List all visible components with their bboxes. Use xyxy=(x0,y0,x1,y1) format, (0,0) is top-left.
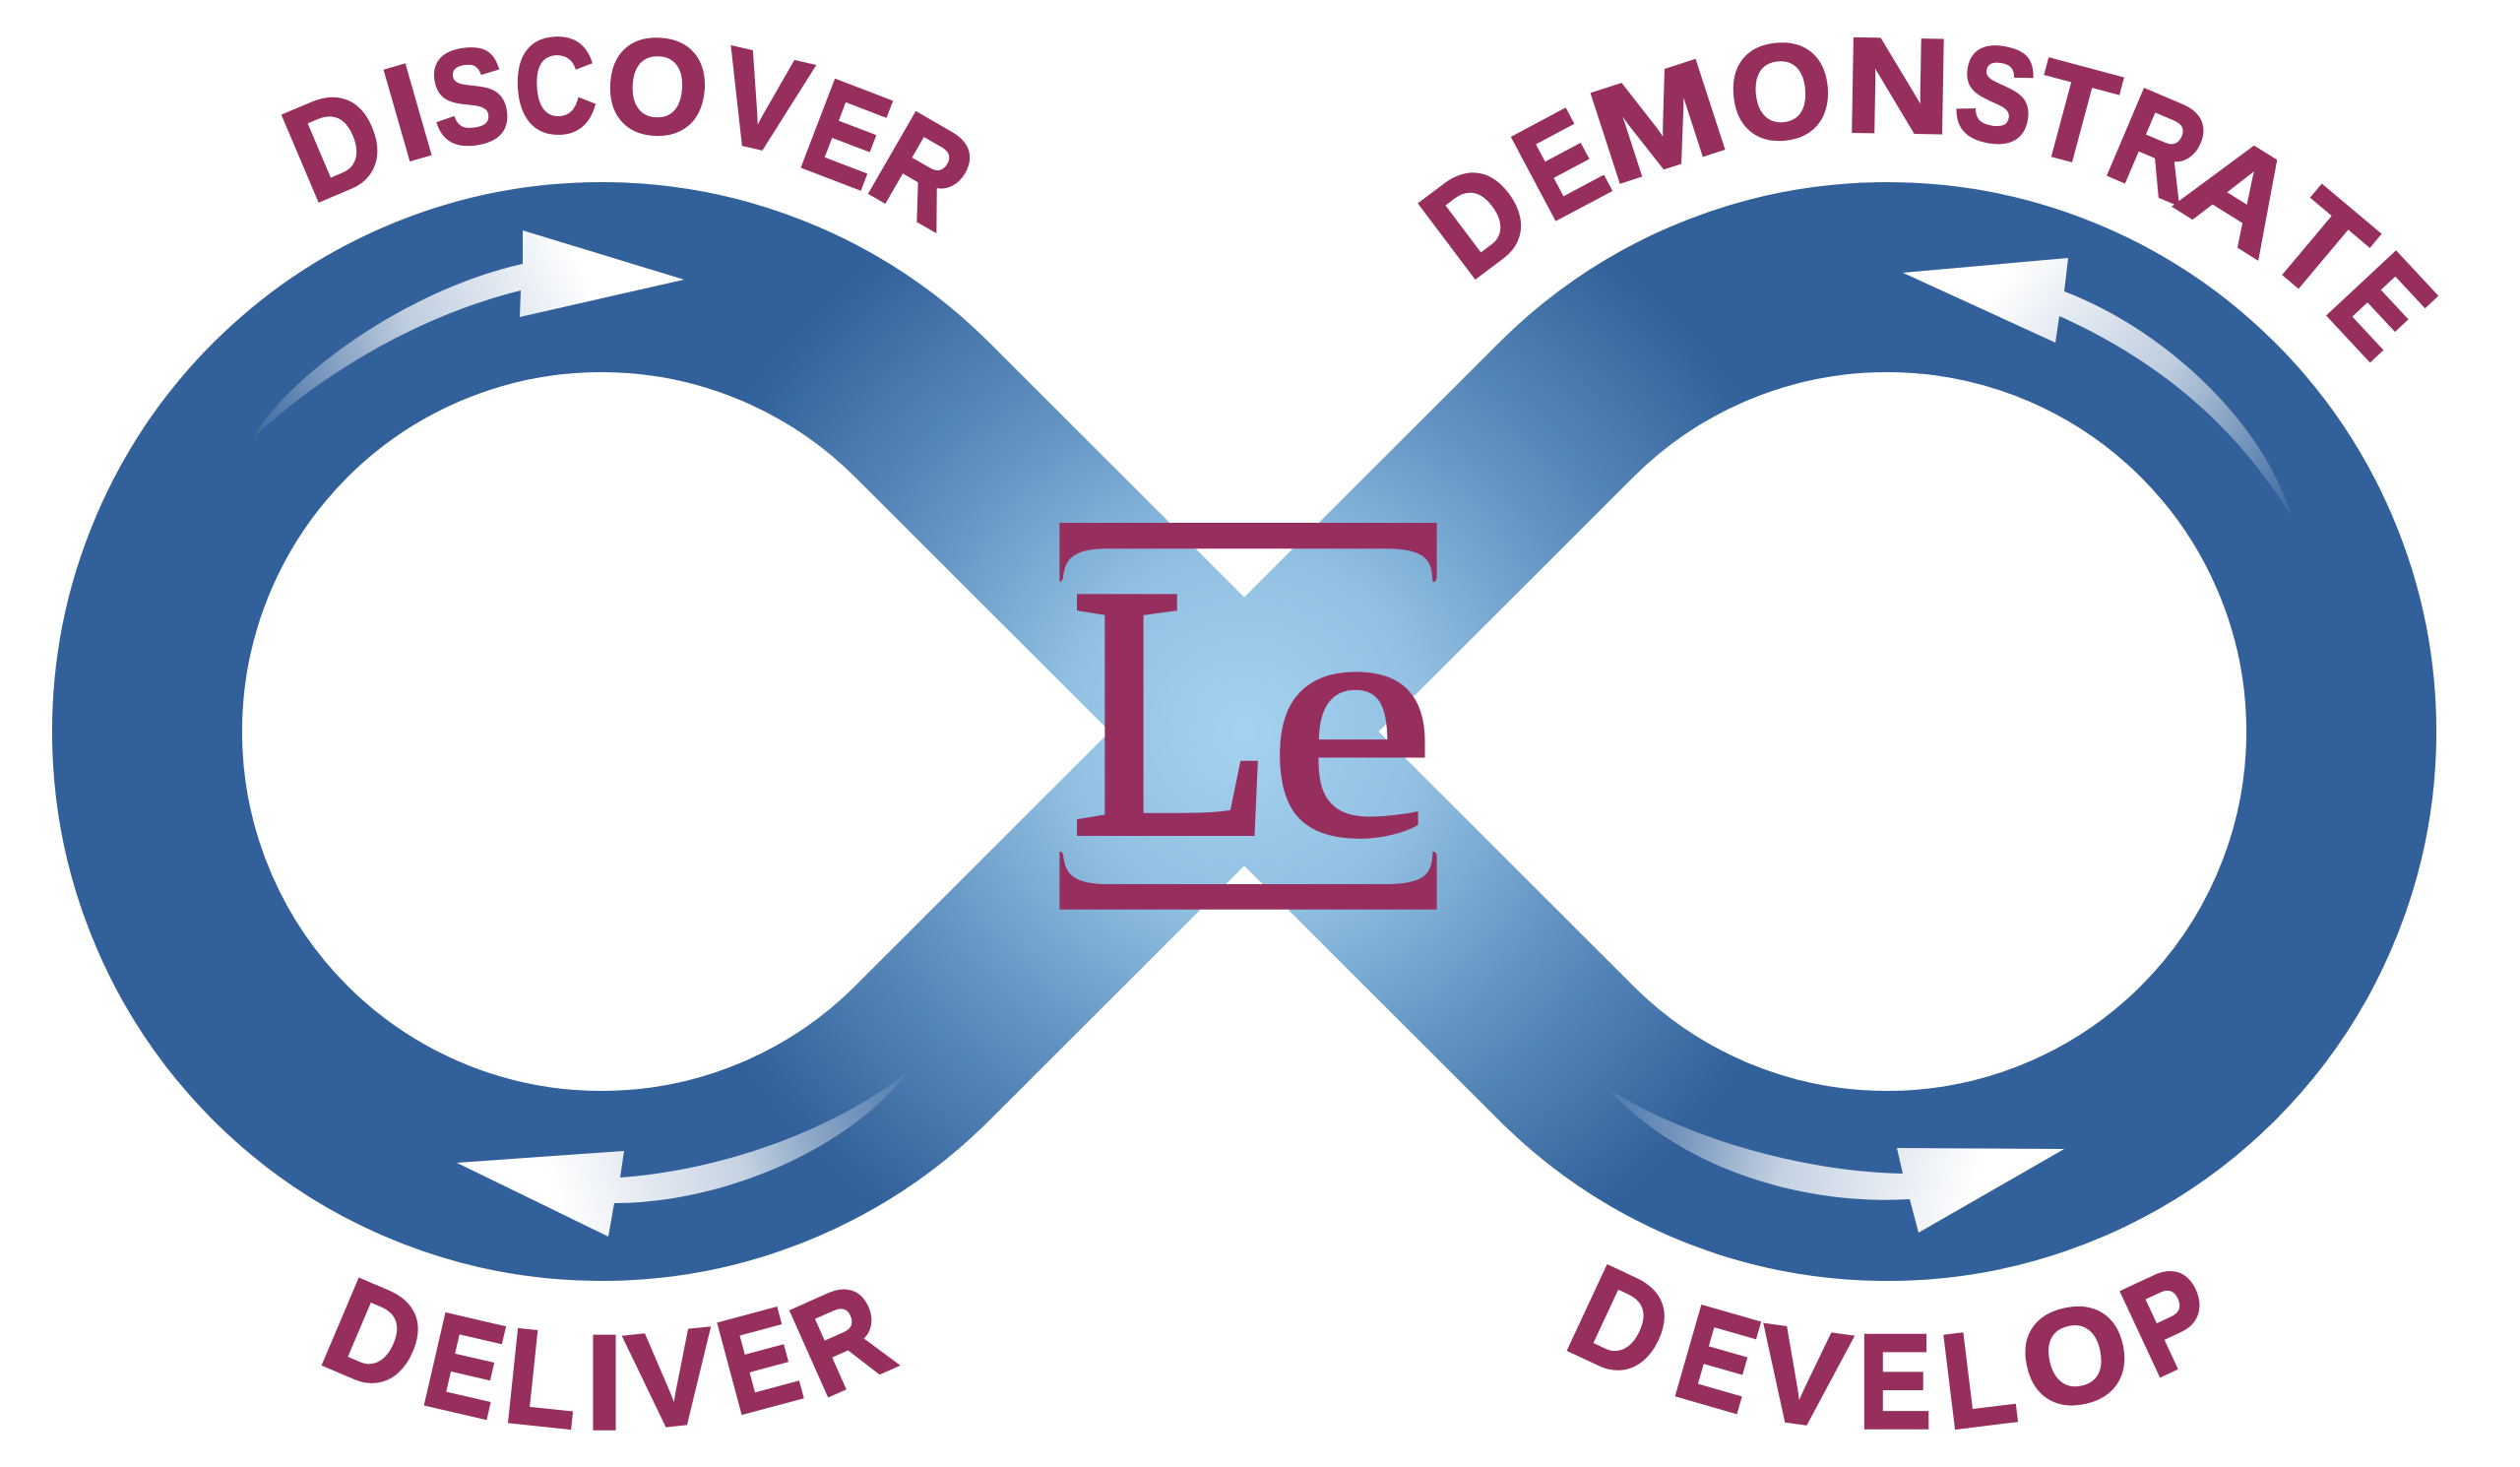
arrow: deliver xyxy=(457,1072,908,1237)
label: DEMONSTRATE: N xyxy=(1844,11,1952,161)
logo top bracket xyxy=(1059,523,1437,582)
label: DELIVER xyxy=(305,1250,912,1458)
label: DEMONSTRATE: O xyxy=(1724,13,1838,171)
label: DEVELOP: E xyxy=(1662,1277,1774,1441)
label: DEMONSTRATE: S xyxy=(1945,14,2048,175)
label: DEMONSTRATE: T xyxy=(2242,163,2398,328)
label: DISCOVER: C xyxy=(511,8,599,162)
logo bottom bracket xyxy=(1059,852,1437,910)
label: DEVELOP: E xyxy=(1858,1308,1931,1457)
label: DISCOVER: S xyxy=(421,18,518,176)
label: DISCOVER: R xyxy=(849,85,997,257)
label: DISCOVER: O xyxy=(602,9,713,164)
label: DEVELOP: P xyxy=(2103,1237,2237,1405)
label: DELIVER: E xyxy=(705,1279,814,1443)
label: DEVELOP: L xyxy=(1934,1301,2024,1458)
label: DEMONSTRATE: D xyxy=(1396,132,1557,305)
logo: Le monogram xyxy=(1059,514,1437,910)
label: DELIVER: E xyxy=(412,1285,517,1447)
label: DISCOVER: D xyxy=(265,58,405,230)
arrow: develop xyxy=(1607,1088,2064,1233)
label: DEVELOP: O xyxy=(2008,1273,2143,1440)
label: DELIVER: L xyxy=(499,1301,586,1457)
label: DISCOVER: E xyxy=(786,51,908,218)
label: DELIVER: V xyxy=(620,1301,723,1458)
logo letter e: e xyxy=(1268,533,1435,906)
label: DEMONSTRATE: T xyxy=(2017,32,2131,196)
logo letter L: L xyxy=(1071,514,1274,910)
label: DEMONSTRATE: R xyxy=(2090,61,2227,232)
label: DELIVER: D xyxy=(305,1250,445,1423)
arrow: discover xyxy=(253,230,684,438)
label: DELIVER: I xyxy=(586,1308,623,1457)
label: DEVELOP: V xyxy=(1748,1296,1857,1457)
label: DEMONSTRATE: A xyxy=(2157,101,2324,284)
label: DELIVER: R xyxy=(773,1254,912,1426)
label: DISCOVER: V xyxy=(705,20,821,184)
label: DISCOVER: I xyxy=(369,35,446,189)
label: DEMONSTRATE: M xyxy=(1574,31,1741,212)
label: DEMONSTRATE: E xyxy=(1493,82,1628,248)
label: DEMONSTRATE: E xyxy=(2302,227,2462,383)
label: DEMONSTRATE xyxy=(1396,11,2462,383)
label: DEVELOP xyxy=(1549,1237,2237,1458)
infinity band xyxy=(147,278,2342,1185)
arrow: demonstrate xyxy=(1903,258,2292,517)
label: DISCOVER xyxy=(265,8,997,257)
label: DEVELOP: D xyxy=(1549,1237,1693,1410)
